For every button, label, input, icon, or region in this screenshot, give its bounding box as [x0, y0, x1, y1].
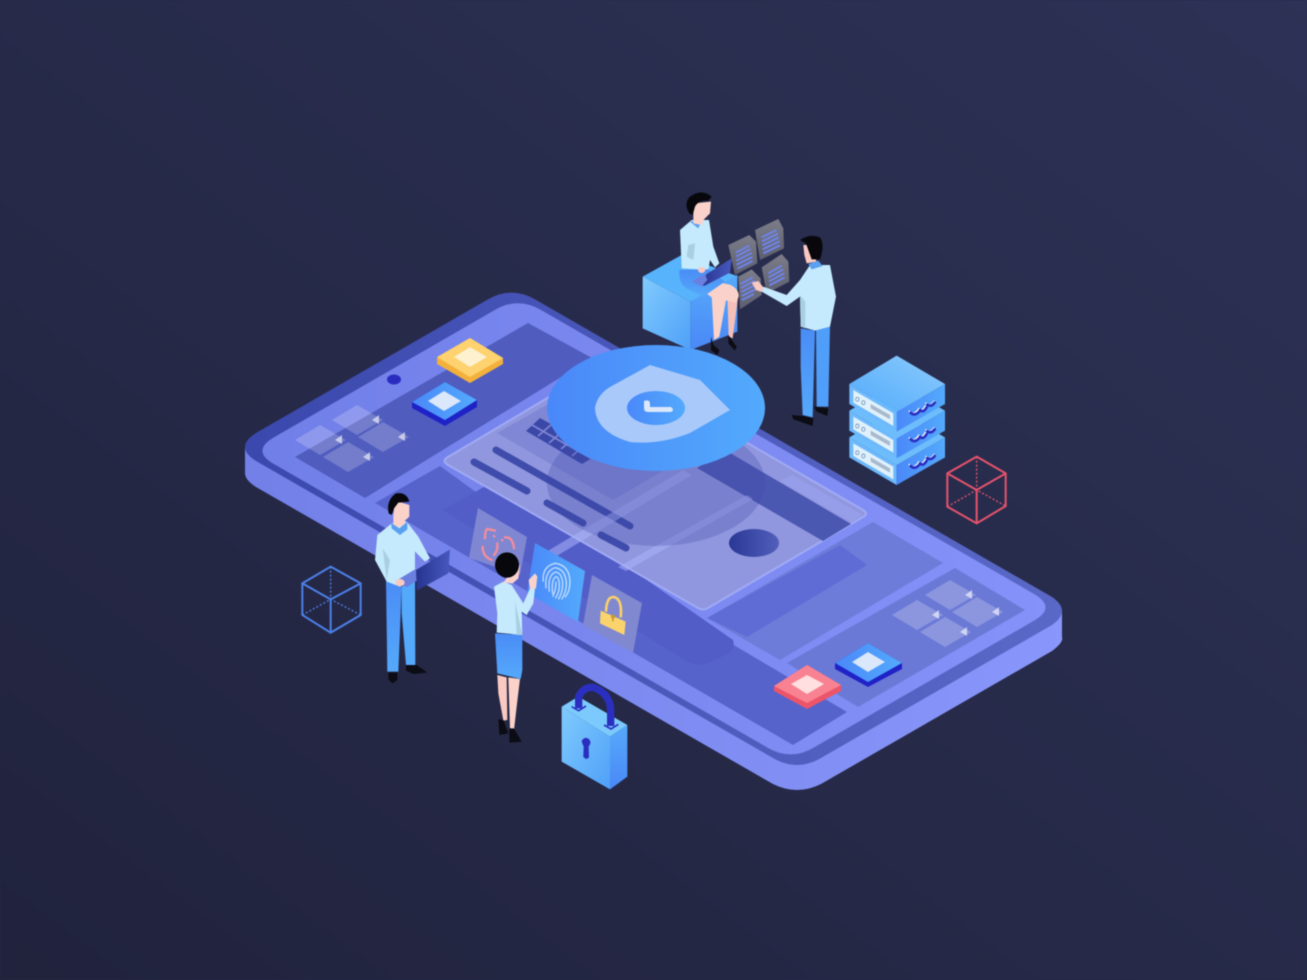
dark circle — [729, 529, 779, 557]
folder tiles: top tray — [295, 405, 409, 472]
panel: bottom app tray — [787, 568, 1025, 707]
server stack — [849, 356, 945, 485]
hand — [395, 579, 405, 586]
folder tiles: bottom tray — [892, 580, 1003, 647]
panel: right promo card — [707, 522, 943, 660]
server unit 2 — [849, 383, 945, 458]
server unit 3 — [849, 410, 945, 485]
legs — [497, 675, 507, 721]
dark band — [697, 450, 851, 541]
wireframe cube: blue — [302, 567, 361, 633]
chip: yellow — [437, 338, 503, 383]
doc 4 — [762, 254, 789, 293]
panel: right promo inner — [707, 545, 867, 637]
laptop — [700, 258, 732, 286]
chip: blue top — [412, 382, 477, 426]
hair — [800, 236, 822, 259]
shield disk — [547, 345, 765, 471]
lock top — [562, 697, 627, 737]
neck and face — [503, 565, 520, 583]
neck and face — [803, 245, 817, 263]
near calf — [712, 295, 727, 340]
legs — [402, 578, 415, 665]
panel: lower content strip — [375, 466, 847, 745]
chip: blue bottom — [835, 643, 902, 687]
skirt — [679, 269, 725, 297]
doc 3 — [738, 269, 762, 309]
biometric card: padlock — [583, 575, 642, 653]
phone side thickness — [245, 447, 1062, 790]
server unit 1 — [849, 356, 945, 432]
light strip 2 — [618, 495, 753, 571]
light strip 1 — [546, 470, 692, 557]
lock side — [610, 725, 627, 789]
disk shadow — [547, 420, 765, 546]
face — [693, 202, 711, 225]
keyhole — [582, 738, 590, 759]
text line 4 — [601, 535, 626, 548]
padlock 3d — [562, 687, 627, 789]
panel: central translucent card — [444, 364, 866, 610]
doc 1 — [728, 235, 757, 275]
hand — [529, 573, 537, 589]
keyboard keys — [526, 418, 602, 464]
text line 3 — [547, 503, 583, 523]
panel: soft shadow on content strip — [443, 478, 734, 664]
doc 2 — [755, 219, 784, 260]
person: seated woman — [679, 192, 739, 355]
person: man with laptop — [375, 493, 450, 683]
phone rim — [245, 293, 1062, 765]
shoes — [792, 415, 813, 426]
shoes — [711, 335, 737, 355]
lock front — [562, 707, 610, 789]
text line 2 — [474, 462, 527, 491]
chip: red — [774, 665, 841, 709]
hand — [698, 267, 705, 273]
shirt — [494, 582, 535, 635]
person: woman at biometric card — [494, 552, 537, 743]
hand — [752, 281, 763, 292]
person: standing man right — [752, 236, 836, 426]
clock hands — [644, 400, 673, 412]
face — [393, 501, 409, 527]
thighs — [704, 283, 739, 303]
shackle plates — [572, 706, 618, 729]
collar — [391, 522, 407, 535]
hair — [686, 192, 712, 215]
hair — [495, 552, 519, 578]
phone device — [245, 293, 1062, 790]
shoes — [498, 719, 508, 735]
disk — [547, 345, 765, 471]
shirt — [680, 220, 719, 270]
biometric card: face id — [469, 508, 527, 575]
seat cube — [643, 255, 738, 350]
laptop — [416, 549, 450, 591]
panel: top app tray — [295, 323, 592, 498]
legs — [801, 328, 815, 417]
shoes — [388, 673, 397, 683]
shirt — [375, 522, 430, 587]
small light tab — [780, 475, 863, 522]
hair — [388, 493, 409, 515]
biometric card: fingerprint — [527, 543, 585, 622]
text line 1 — [496, 450, 630, 526]
shackle — [579, 687, 611, 726]
status dot — [387, 374, 401, 384]
far calf — [727, 295, 738, 338]
panel: keyboard section — [497, 375, 716, 500]
collar — [690, 220, 702, 228]
skirt — [495, 633, 522, 679]
shield — [595, 365, 730, 443]
document cards — [728, 219, 789, 309]
wireframe cube: red — [947, 457, 1006, 523]
phone screen — [262, 303, 1046, 754]
collar — [808, 261, 823, 269]
clock face — [627, 391, 685, 425]
shirt — [762, 265, 836, 331]
